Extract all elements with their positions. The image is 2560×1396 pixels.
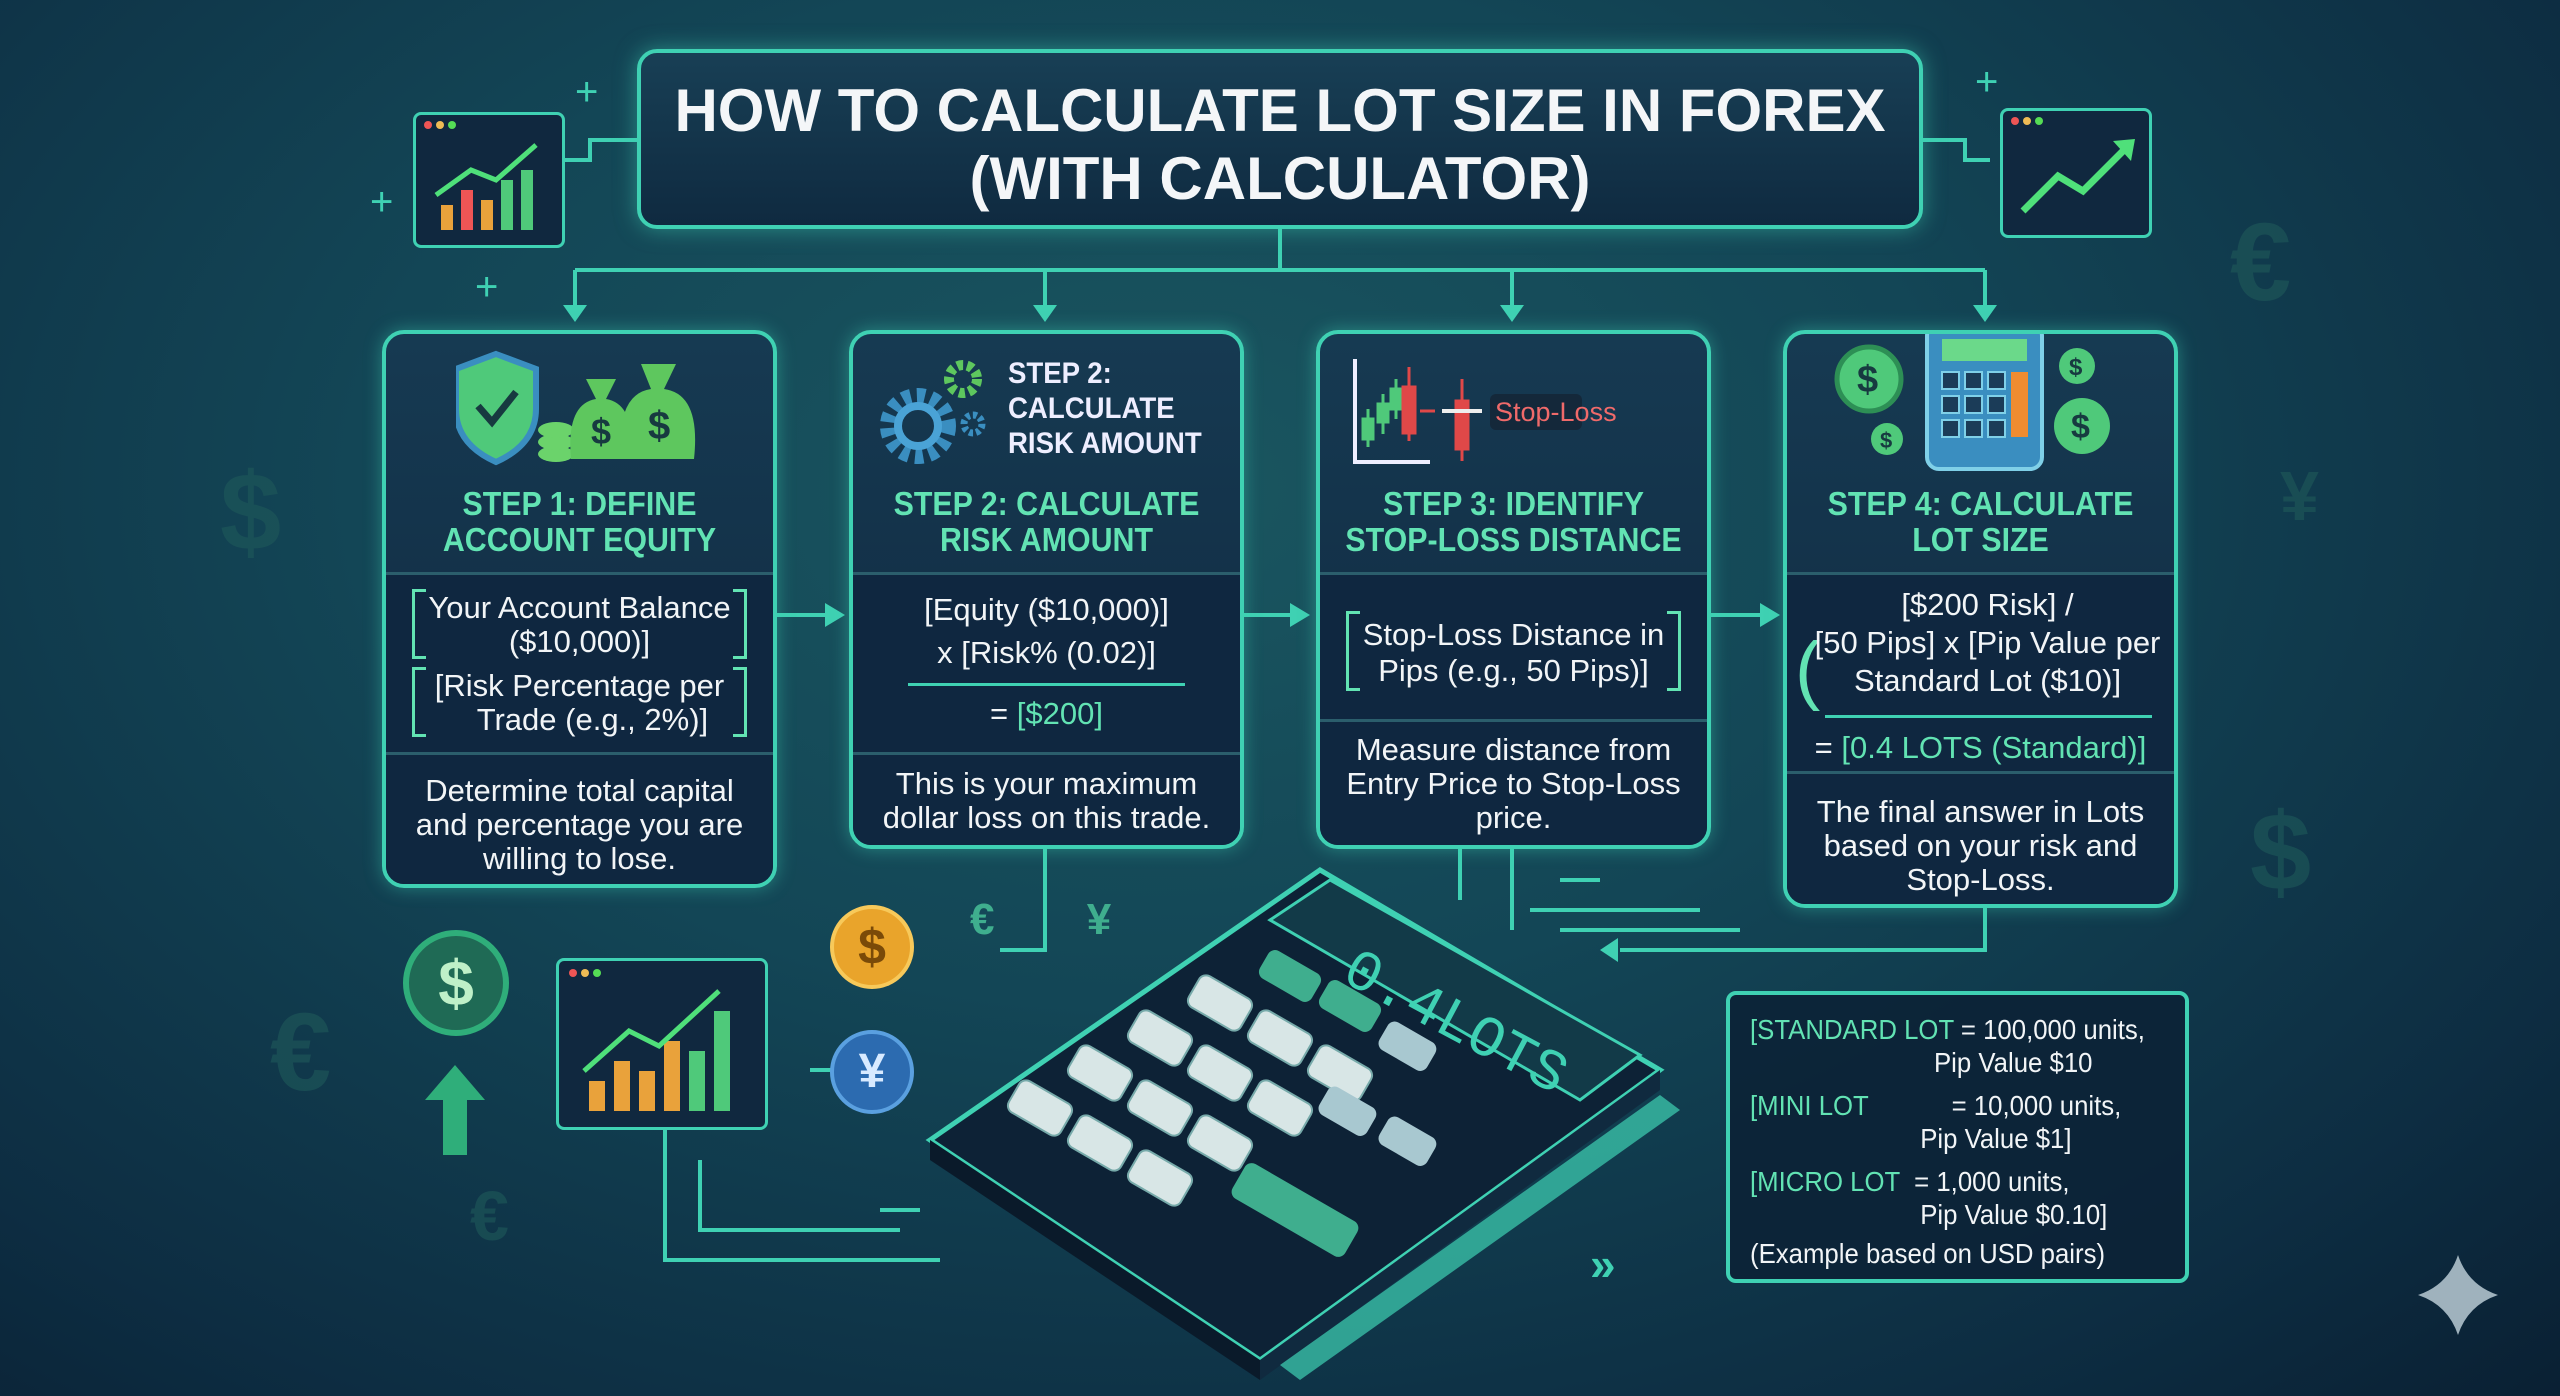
- text: step 2 icon label: CALCULATE: [1008, 392, 1175, 425]
- formula: step 1: Trade (e.g., 2%)]: [477, 702, 708, 737]
- formula: step 4: (: [1795, 627, 1820, 712]
- background decorations: +: [475, 265, 498, 309]
- text: step 2 icon label: STEP 2:: [1008, 357, 1112, 390]
- title: (WITH CALCULATOR): [970, 145, 1590, 212]
- icon: calculator with coins: $: [2071, 408, 2090, 446]
- icon: calculator with coins: [1834, 334, 2110, 471]
- description: step 3: Measure distance from: [1356, 732, 1671, 767]
- icon: candlestick stop-loss: [1353, 359, 1617, 464]
- description: step 1: Determine total capital: [425, 773, 734, 808]
- formula: step 1: ($10,000)]: [509, 624, 650, 659]
- icon: yen coin: ¥: [859, 1045, 885, 1098]
- legend: lot sizes: [MICRO LOT = 1,000 units,: [1750, 1166, 2070, 1197]
- heading: step 3: STOP-LOSS DISTANCE: [1345, 521, 1682, 558]
- star: [2418, 1255, 2498, 1335]
- formula: step 1: Your Account Balance: [428, 590, 731, 625]
- legend: lot sizes: Pip Value $1]: [1920, 1123, 2072, 1154]
- formula: step 4: [$200 Risk] /: [1901, 587, 2074, 622]
- legend: lot sizes: [STANDARD LOT = 100,000 units,: [1750, 1014, 2145, 1045]
- icon: dollar circle: [403, 930, 509, 1036]
- icon: gears: [880, 360, 986, 464]
- icon: calculator with coins: $: [1857, 359, 1878, 401]
- heading: step 4: LOT SIZE: [1912, 521, 2049, 558]
- heading: step 3: [1345, 485, 1682, 558]
- heading: step 1: ACCOUNT EQUITY: [443, 521, 716, 558]
- formula: step 4: = [0.4 LOTS (Standard)]: [1815, 730, 2146, 765]
- icon: dollar circle: $: [438, 947, 474, 1019]
- description: step 3: Entry Price to Stop-Loss: [1346, 766, 1681, 801]
- description: step 2: dollar loss on this trade.: [883, 800, 1210, 835]
- background decorations: €: [270, 991, 331, 1114]
- heading: step 4: [1828, 485, 2133, 558]
- formula: step 2: [Equity ($10,000)]: [924, 592, 1169, 627]
- description: step 4: [1787, 771, 2174, 904]
- icon: chart window bottom: [556, 958, 768, 1130]
- text: step 2 icon label: [1008, 357, 1202, 460]
- icon: shield and money bags: $: [648, 404, 670, 448]
- formula: step 2: = [$200]: [990, 696, 1103, 731]
- description: step 3: price.: [1476, 800, 1551, 835]
- background decorations: +: [370, 180, 393, 224]
- background decorations: €: [470, 1177, 509, 1255]
- icon: calculator with coins: $: [2069, 354, 2083, 381]
- formula: step 3: [1320, 572, 1707, 719]
- title: HOW TO CALCULATE LOT SIZE IN FOREX: [674, 77, 1886, 144]
- icon: candlestick stop-loss: Stop-Loss: [1495, 397, 1617, 427]
- icon: currency symbols: € ¥: [970, 895, 1111, 944]
- formula: step 1: [386, 572, 773, 752]
- formula: step 1: [Risk Percentage per: [435, 668, 724, 703]
- panel: step 4: [1783, 330, 2178, 908]
- description: step 1: willing to lose.: [483, 841, 676, 876]
- big isometric calculator: [926, 867, 1680, 1380]
- heading: step 2: STEP 2: CALCULATE: [894, 485, 1199, 522]
- big isometric calculator: »: [1590, 1238, 1616, 1290]
- icon: gold coin: [830, 905, 914, 989]
- legend: lot sizes: (Example based on USD pairs): [1750, 1238, 2105, 1269]
- description: step 2: This is your maximum: [896, 766, 1197, 801]
- formula: step 3: Stop-Loss Distance in: [1363, 617, 1664, 652]
- legend: lot sizes: Pip Value $0.10]: [1920, 1199, 2107, 1230]
- description: step 2: [853, 752, 1240, 845]
- background decorations: ¥: [2280, 457, 2319, 535]
- heading: step 4: STEP 4: CALCULATE: [1828, 485, 2133, 522]
- icon: calculator with coins: $: [1880, 428, 1892, 453]
- formula: step 3: Pips (e.g., 50 Pips)]: [1378, 653, 1649, 688]
- legend: lot sizes: [1726, 991, 2189, 1283]
- description: step 1: and percentage you are: [416, 807, 743, 842]
- heading: step 2: [894, 485, 1199, 558]
- big isometric calculator: 0.4LOTS: [1332, 939, 1577, 1110]
- icon: yen coin: [830, 1030, 914, 1114]
- legend: lot sizes: [MINI LOT = 10,000 units,: [1750, 1090, 2121, 1121]
- description: step 3: [1320, 719, 1707, 845]
- background decorations: $: [220, 451, 281, 574]
- description: step 4: based on your risk and: [1824, 828, 2137, 863]
- description: step 1: [386, 752, 773, 884]
- icon: up arrow: [425, 1065, 485, 1155]
- description: step 4: The final answer in Lots: [1817, 794, 2144, 829]
- panel: step 2: [849, 330, 1244, 849]
- formula: step 4: [1787, 572, 2174, 771]
- heading: step 3: STEP 3: IDENTIFY: [1383, 485, 1644, 522]
- formula: step 4: [50 Pips] x [Pip Value per: [1815, 625, 2160, 660]
- heading: step 1: STEP 1: DEFINE: [463, 485, 696, 522]
- panel: step 3: [1316, 330, 1711, 849]
- icon: chart window left: [413, 112, 565, 248]
- background decorations: €: [2230, 201, 2291, 324]
- heading: step 1: [443, 485, 716, 558]
- legend: lot sizes: Pip Value $10: [1934, 1047, 2092, 1078]
- description: step 4: Stop-Loss.: [1906, 862, 2055, 897]
- icon: shield and money bags: $: [591, 411, 611, 452]
- icon: chart window right: [2000, 108, 2152, 238]
- title: [637, 49, 1923, 229]
- background decorations: $: [2250, 791, 2311, 914]
- formula: step 4: Standard Lot ($10)]: [1854, 663, 2121, 698]
- icon: shield and money bags: [456, 350, 696, 466]
- background decorations: +: [575, 70, 598, 114]
- panel: step 1: [382, 330, 777, 888]
- icon: gold coin: $: [858, 919, 886, 975]
- background decorations: +: [1975, 60, 1998, 104]
- heading: step 2: RISK AMOUNT: [940, 521, 1153, 558]
- formula: step 2: [853, 572, 1240, 752]
- formula: step 2: x [Risk% (0.02)]: [937, 635, 1156, 670]
- text: step 2 icon label: RISK AMOUNT: [1008, 427, 1202, 460]
